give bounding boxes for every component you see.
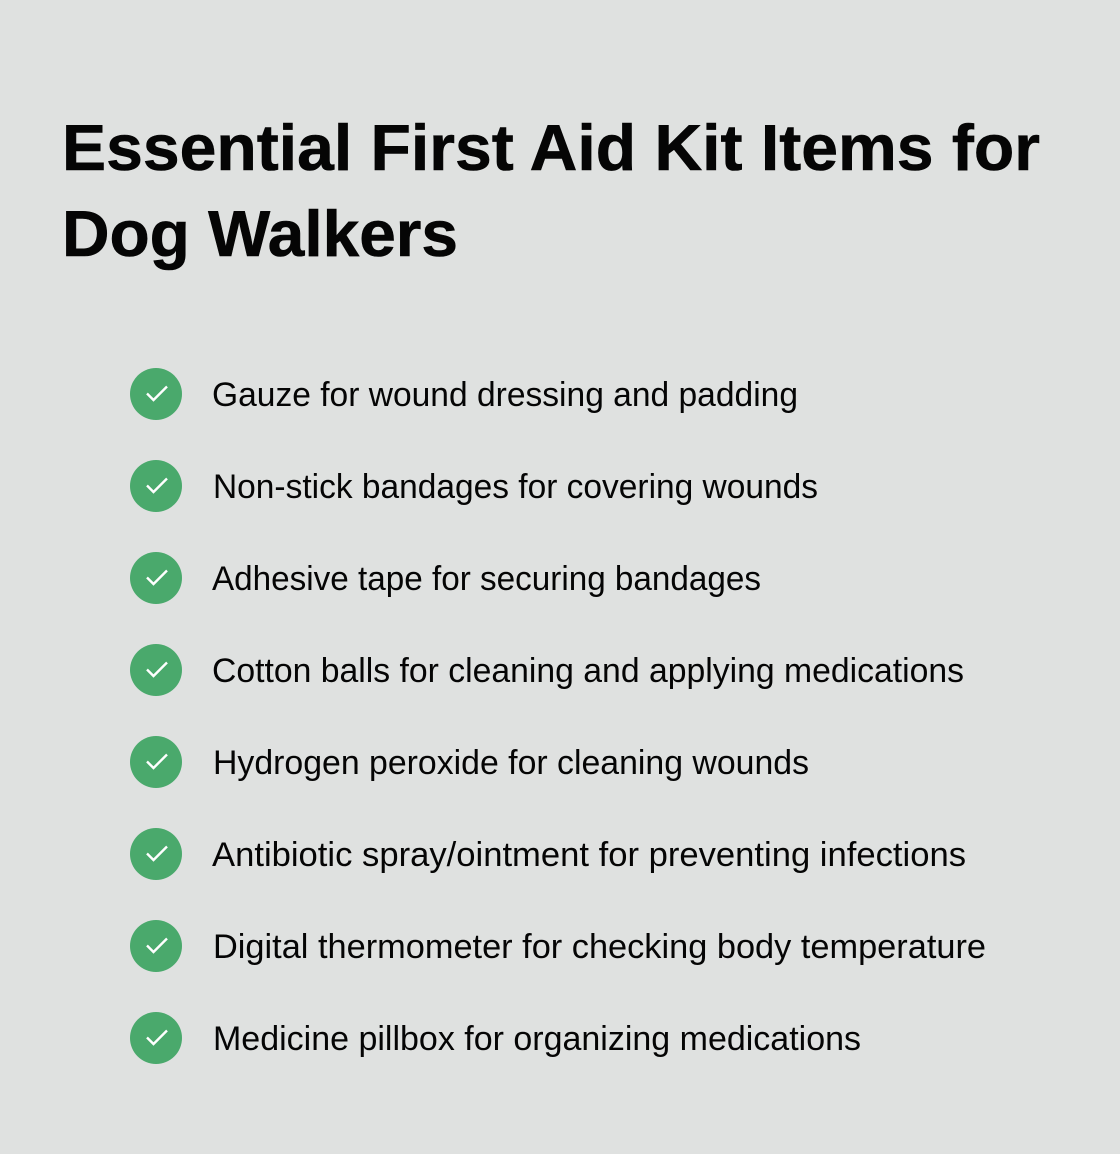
item: non-stick bandages bbox=[130, 460, 818, 512]
title: Essential First Aid Kit Items for bbox=[62, 111, 1040, 184]
checklist bbox=[130, 368, 986, 1064]
item: hydrogen peroxide: Hydrogen peroxide for cleaning wounds bbox=[213, 744, 809, 782]
item: cotton balls: Cotton balls for cleaning and applying medications bbox=[212, 652, 964, 690]
item: hydrogen peroxide bbox=[130, 736, 809, 788]
item: antibiotic spray: Antibiotic spray/ointment for preventing infections bbox=[212, 836, 966, 874]
item: medicine pillbox: Medicine pillbox for organizing medications bbox=[213, 1020, 861, 1058]
item: digital thermometer bbox=[130, 920, 986, 972]
item: adhesive tape bbox=[130, 552, 761, 604]
item: antibiotic spray bbox=[130, 828, 966, 880]
item: cotton balls bbox=[130, 644, 964, 696]
title bbox=[62, 111, 1040, 270]
item: non-stick bandages: Non-stick bandages for covering wounds bbox=[213, 468, 818, 506]
item: medicine pillbox bbox=[130, 1012, 861, 1064]
item: adhesive tape: Adhesive tape for securing bandages bbox=[212, 560, 761, 598]
item: digital thermometer: Digital thermometer for checking body temperature bbox=[213, 928, 986, 966]
title: Dog Walkers bbox=[62, 197, 458, 270]
item: gauze bbox=[130, 368, 798, 420]
item: gauze: Gauze for wound dressing and padding bbox=[212, 376, 798, 414]
